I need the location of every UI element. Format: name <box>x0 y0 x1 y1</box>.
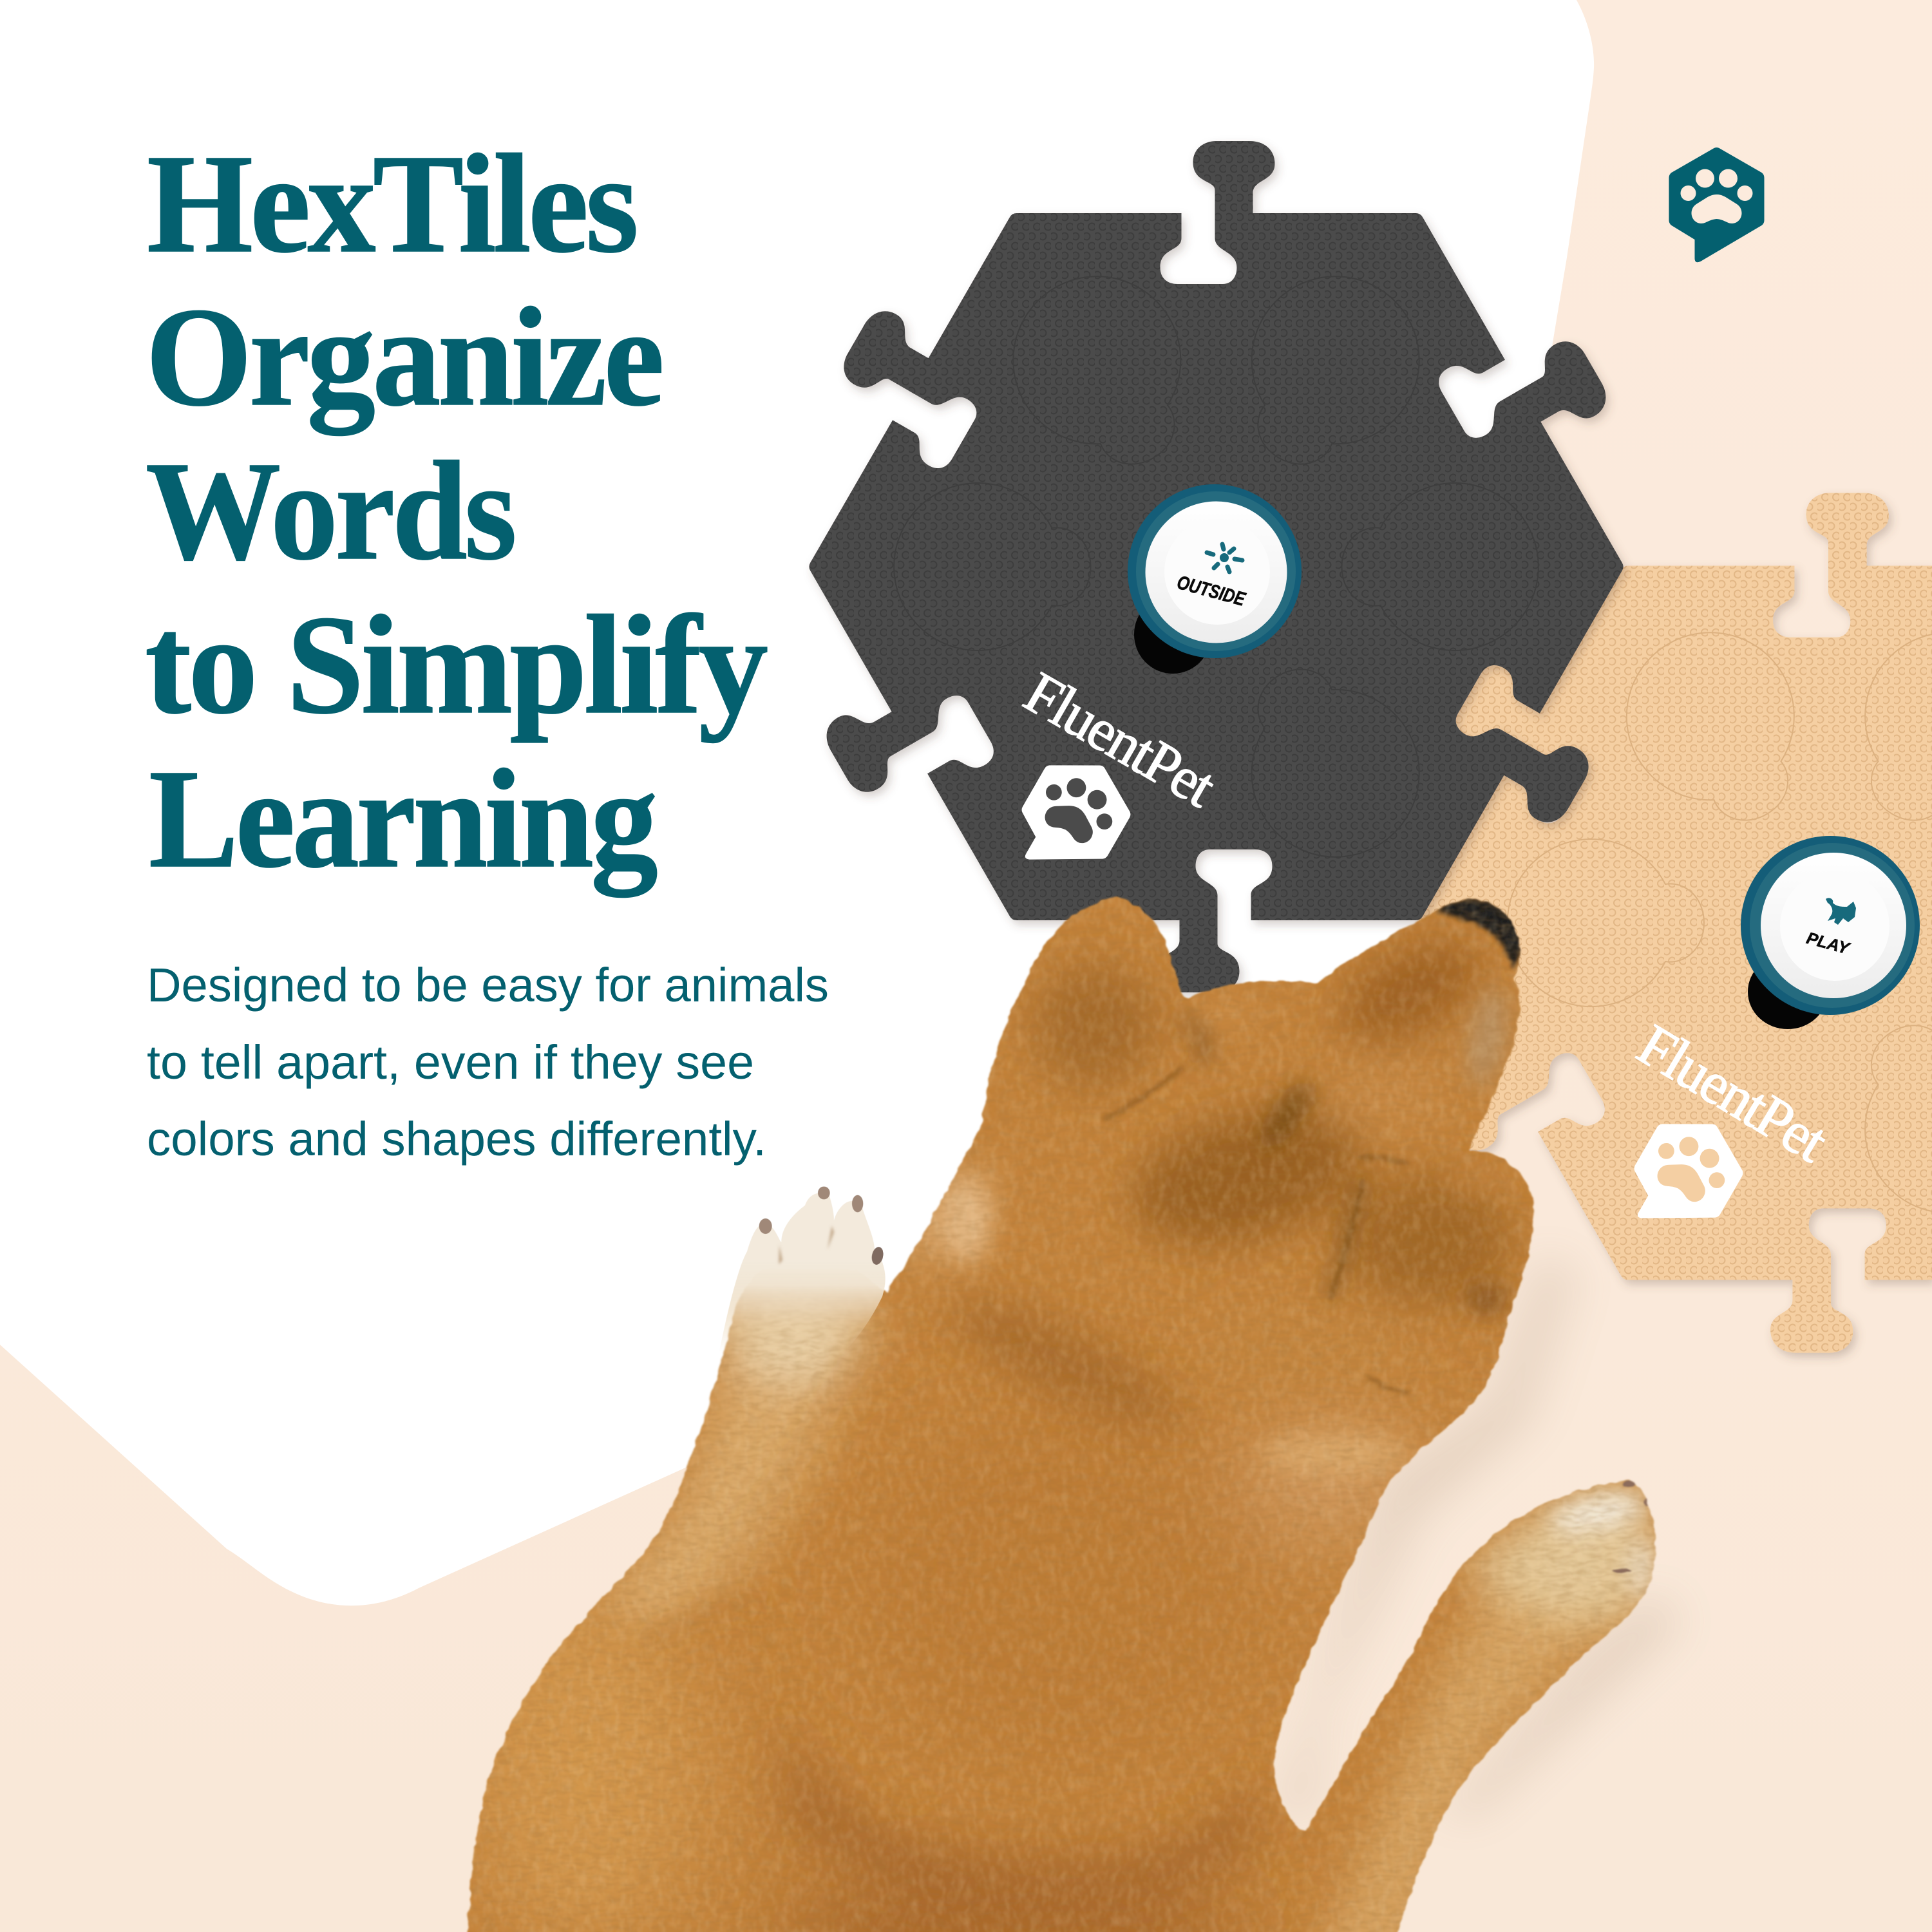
body text <box>147 958 829 1166</box>
background: large white rounded hexagon <box>0 0 1594 1605</box>
icon: cat <box>1826 898 1856 925</box>
label: OUTSIDE: OUTSIDE <box>1175 572 1248 611</box>
right paw cream <box>1465 1482 1653 1625</box>
title <box>145 125 767 898</box>
title: HexTiles <box>147 125 636 282</box>
paw fur <box>719 1193 886 1361</box>
right leg light <box>1309 1513 1622 1932</box>
wordmark: FluentPet on dark tile: FluentPet <box>1014 659 1227 820</box>
left leg light <box>596 1348 866 1642</box>
button: OUTSIDE <box>1128 484 1302 674</box>
button: PLAY <box>1741 836 1920 1029</box>
nose <box>1437 899 1521 968</box>
dog base <box>466 898 1656 1932</box>
dog illustration <box>451 869 1700 1932</box>
lower back crescent shade <box>779 1703 1262 1906</box>
body fur shading <box>466 1405 1419 1932</box>
panel: dark hextile <box>809 140 1629 998</box>
body text: colors and shapes differently. <box>147 1112 766 1166</box>
title: Organize <box>146 278 661 436</box>
icon: sun <box>1207 544 1242 572</box>
label: PLAY: PLAY <box>1804 928 1853 958</box>
title: to Simplify <box>145 586 767 743</box>
body text: to tell apart, even if they see <box>147 1036 754 1089</box>
engraved outlines on dark tile <box>894 246 1539 887</box>
engraved outlines on tan tile <box>1508 602 1932 1244</box>
fur texture <box>451 869 1700 1932</box>
title: Words <box>146 432 514 589</box>
title: Learning <box>149 740 657 898</box>
left paw <box>719 1186 886 1361</box>
dog cast shadow <box>1278 1249 1676 1818</box>
toe gaps <box>779 1226 834 1264</box>
icon: logo on tan tile <box>1613 1101 1757 1252</box>
wordmark: FluentPet on tan tile: FluentPet <box>1627 1011 1839 1175</box>
icon: logo on dark tile <box>1001 742 1145 893</box>
panel: tan hextile <box>1419 493 1932 1361</box>
right paw nails <box>1612 1480 1653 1573</box>
head shading <box>945 899 1521 1473</box>
saddle patch <box>933 1277 1202 1451</box>
body text: Designed to be easy for animals <box>147 958 829 1012</box>
nails <box>759 1186 885 1265</box>
leg seam <box>708 1331 876 1591</box>
icon: FluentPet logo top right <box>1669 147 1765 262</box>
